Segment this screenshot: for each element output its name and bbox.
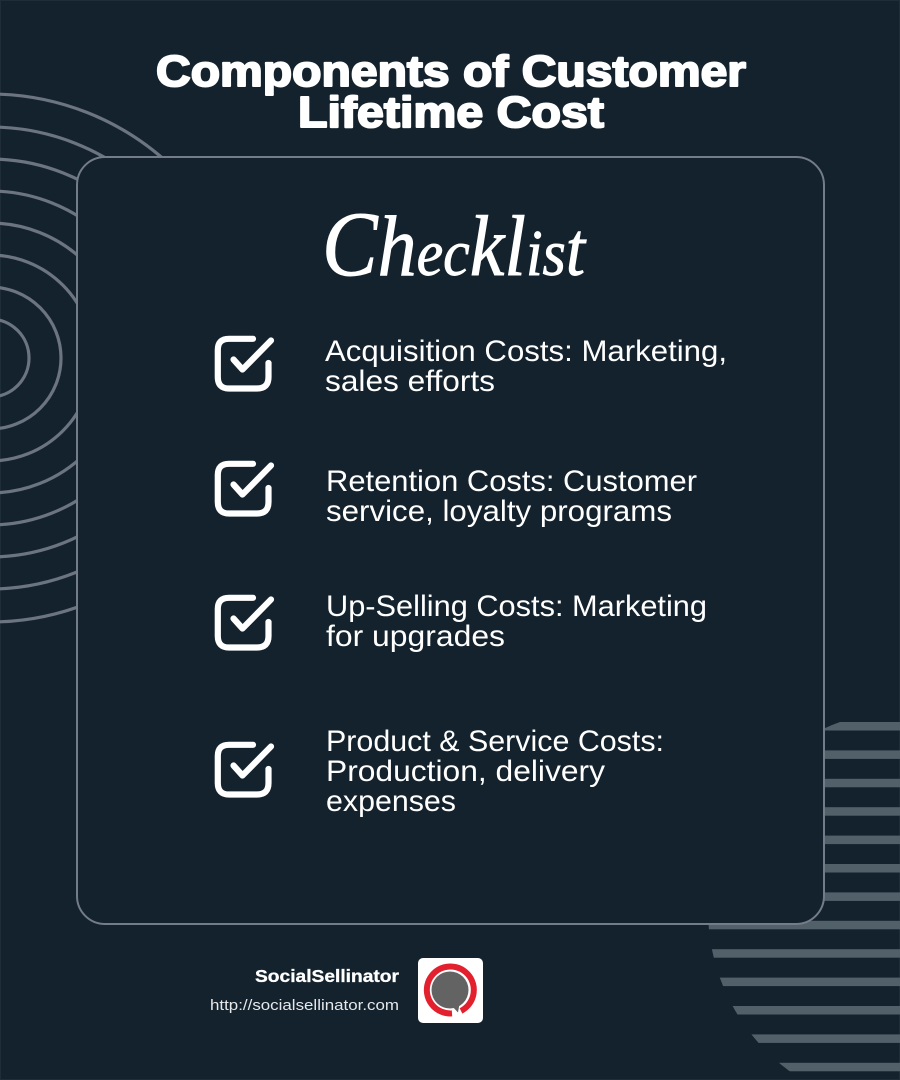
heading: Checklist: Checklist xyxy=(322,193,587,295)
icon: SocialSellinator logo xyxy=(418,958,483,1023)
title xyxy=(156,47,746,137)
footer brand name: SocialSellinator xyxy=(255,966,399,986)
item text: for upgrades xyxy=(326,620,505,653)
item text xyxy=(326,465,697,528)
item text: Retention Costs: Customer xyxy=(326,465,697,498)
icon: checkbox xyxy=(218,464,271,514)
checklist item: acquisition costs xyxy=(218,335,727,398)
icon: checkbox xyxy=(218,745,271,794)
title: Components of Customer xyxy=(156,47,746,96)
item text xyxy=(326,590,707,653)
item text: Up-Selling Costs: Marketing xyxy=(326,590,707,623)
item text: expenses xyxy=(326,785,456,818)
checklist item: retention costs xyxy=(218,464,697,528)
item text xyxy=(326,725,664,818)
striped circle decoration xyxy=(700,722,900,1071)
item text: Product & Service Costs: xyxy=(326,725,664,758)
item text: sales efforts xyxy=(325,365,495,398)
panel: checklist xyxy=(77,157,824,924)
item text xyxy=(325,335,727,398)
icon: checkbox xyxy=(218,339,271,388)
checklist item: up-selling costs xyxy=(218,590,707,653)
icon: checkbox xyxy=(218,598,271,648)
title: Lifetime Cost xyxy=(298,88,604,137)
item text: Acquisition Costs: Marketing, xyxy=(325,335,727,368)
item text: service, loyalty programs xyxy=(326,495,672,528)
checklist item: product and service costs xyxy=(218,725,664,818)
footer url: http://socialsellinator.com xyxy=(210,998,399,1014)
concentric rings decoration xyxy=(0,94,254,622)
item text: Production, delivery xyxy=(326,755,605,788)
